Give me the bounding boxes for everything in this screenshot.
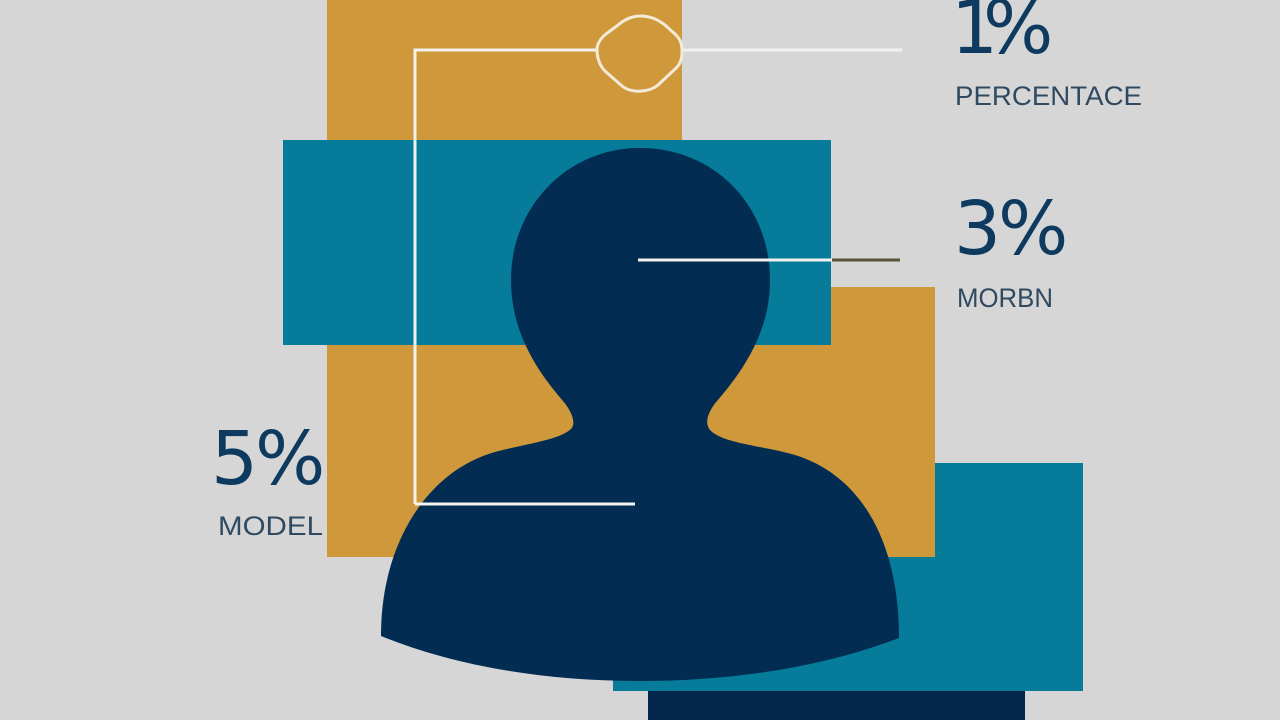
lower teal block [613,463,1083,691]
label: PERCENTAGE: PERCENTACE [955,81,1142,111]
middle ochre block right [640,287,935,557]
stat: 5% [211,416,325,502]
label: MODEL: MODEL [218,511,323,541]
rounded diamond node [597,16,682,91]
top ochre block [327,0,682,140]
stat: 3%: 3 [954,186,1001,272]
bottom navy block [648,690,1025,720]
stat: 3% [954,186,1068,272]
white connector top bracket [415,50,902,504]
connector middle dark [832,258,900,262]
label: MORBN: MORBN [957,283,1053,313]
person silhouette [381,148,899,681]
white connector bottom [415,502,635,506]
stat: 1% [951,0,1053,71]
upper teal block [283,140,831,345]
connector middle white [638,258,832,262]
stat: 5%: % [255,416,325,502]
stat: 5%: 5 [211,416,258,502]
stat: 3%: % [998,186,1068,272]
middle ochre block left [327,345,587,557]
